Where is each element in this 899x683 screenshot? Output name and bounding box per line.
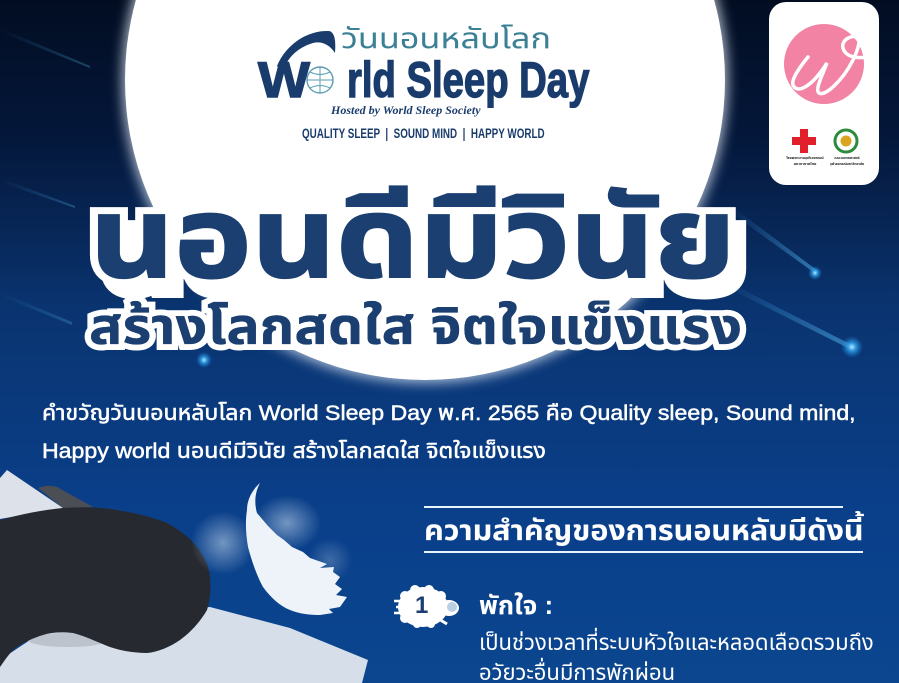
feather glow [191, 495, 352, 582]
logo hosted line: Hosted by World Sleep Society [331, 103, 481, 117]
partner caption right [830, 156, 864, 166]
icon: green seal [834, 128, 858, 154]
logo tagline: QUALITY SLEEP | SOUND MIND | HAPPY WORLD [302, 126, 545, 141]
illustration: pillow, eye mask, feather [0, 470, 368, 683]
sub headline: สร้างโลกสดใส จิตใจแข็งแรง [89, 298, 742, 355]
feather [246, 483, 347, 615]
eye mask [0, 507, 210, 667]
icon: sheep number 1 [394, 585, 459, 628]
logo Thai title: วันนอนหลับโลก [341, 23, 551, 55]
meteors [0, 28, 863, 368]
icon: red cross [792, 129, 816, 153]
logo wordmark: rld Sleep Day [347, 52, 589, 108]
partner caption left [786, 156, 824, 166]
intro text [42, 402, 856, 463]
number 1: 1 [415, 592, 428, 619]
intro text: Happy world นอนดีมีวินัย สร้างโลกสดใส จิตใจแข็งแรง [42, 440, 546, 463]
main headline: นอนดีมีวินัย [100, 188, 746, 314]
partner caption left: โรงพยาบาลจุฬาลงกรณ์ [786, 156, 824, 160]
intro text: คำขวัญวันนอนหลับโลก World Sleep Day พ.ศ. 2565 คือ Quality sleep, Sound mind, [42, 402, 856, 425]
logo swoosh and globe [277, 31, 336, 94]
main headline: นอนดีมีวินัย [90, 175, 736, 301]
icon: pink W circle [784, 24, 864, 104]
partner logo card [769, 2, 879, 185]
partner caption right: คณะแพทยศาสตร์ [834, 156, 860, 160]
partner caption right: จุฬาลงกรณ์มหาวิทยาลัย [830, 162, 864, 166]
partner caption left: สภากาชาดไทย [794, 162, 816, 166]
eye mask strap [38, 486, 93, 508]
logo: World Sleep Day [257, 23, 590, 141]
sub headline: สร้างโลกสดใส จิตใจแข็งแรง [89, 298, 742, 355]
moon [122, 0, 728, 383]
item description: เป็นช่วงเวลาที่ระบบหัวใจและหลอดเลือดรวมถึง [479, 630, 874, 655]
main headline: นอนดีมีวินัย [90, 175, 736, 301]
item title: พักใจ : [479, 590, 553, 620]
item description [479, 628, 874, 683]
item 1 [394, 585, 874, 683]
section heading text: ความสำคัญของการนอนหลับมีดังนี้ [424, 515, 863, 546]
pillow [0, 470, 368, 683]
logo letter W: W [258, 52, 310, 108]
